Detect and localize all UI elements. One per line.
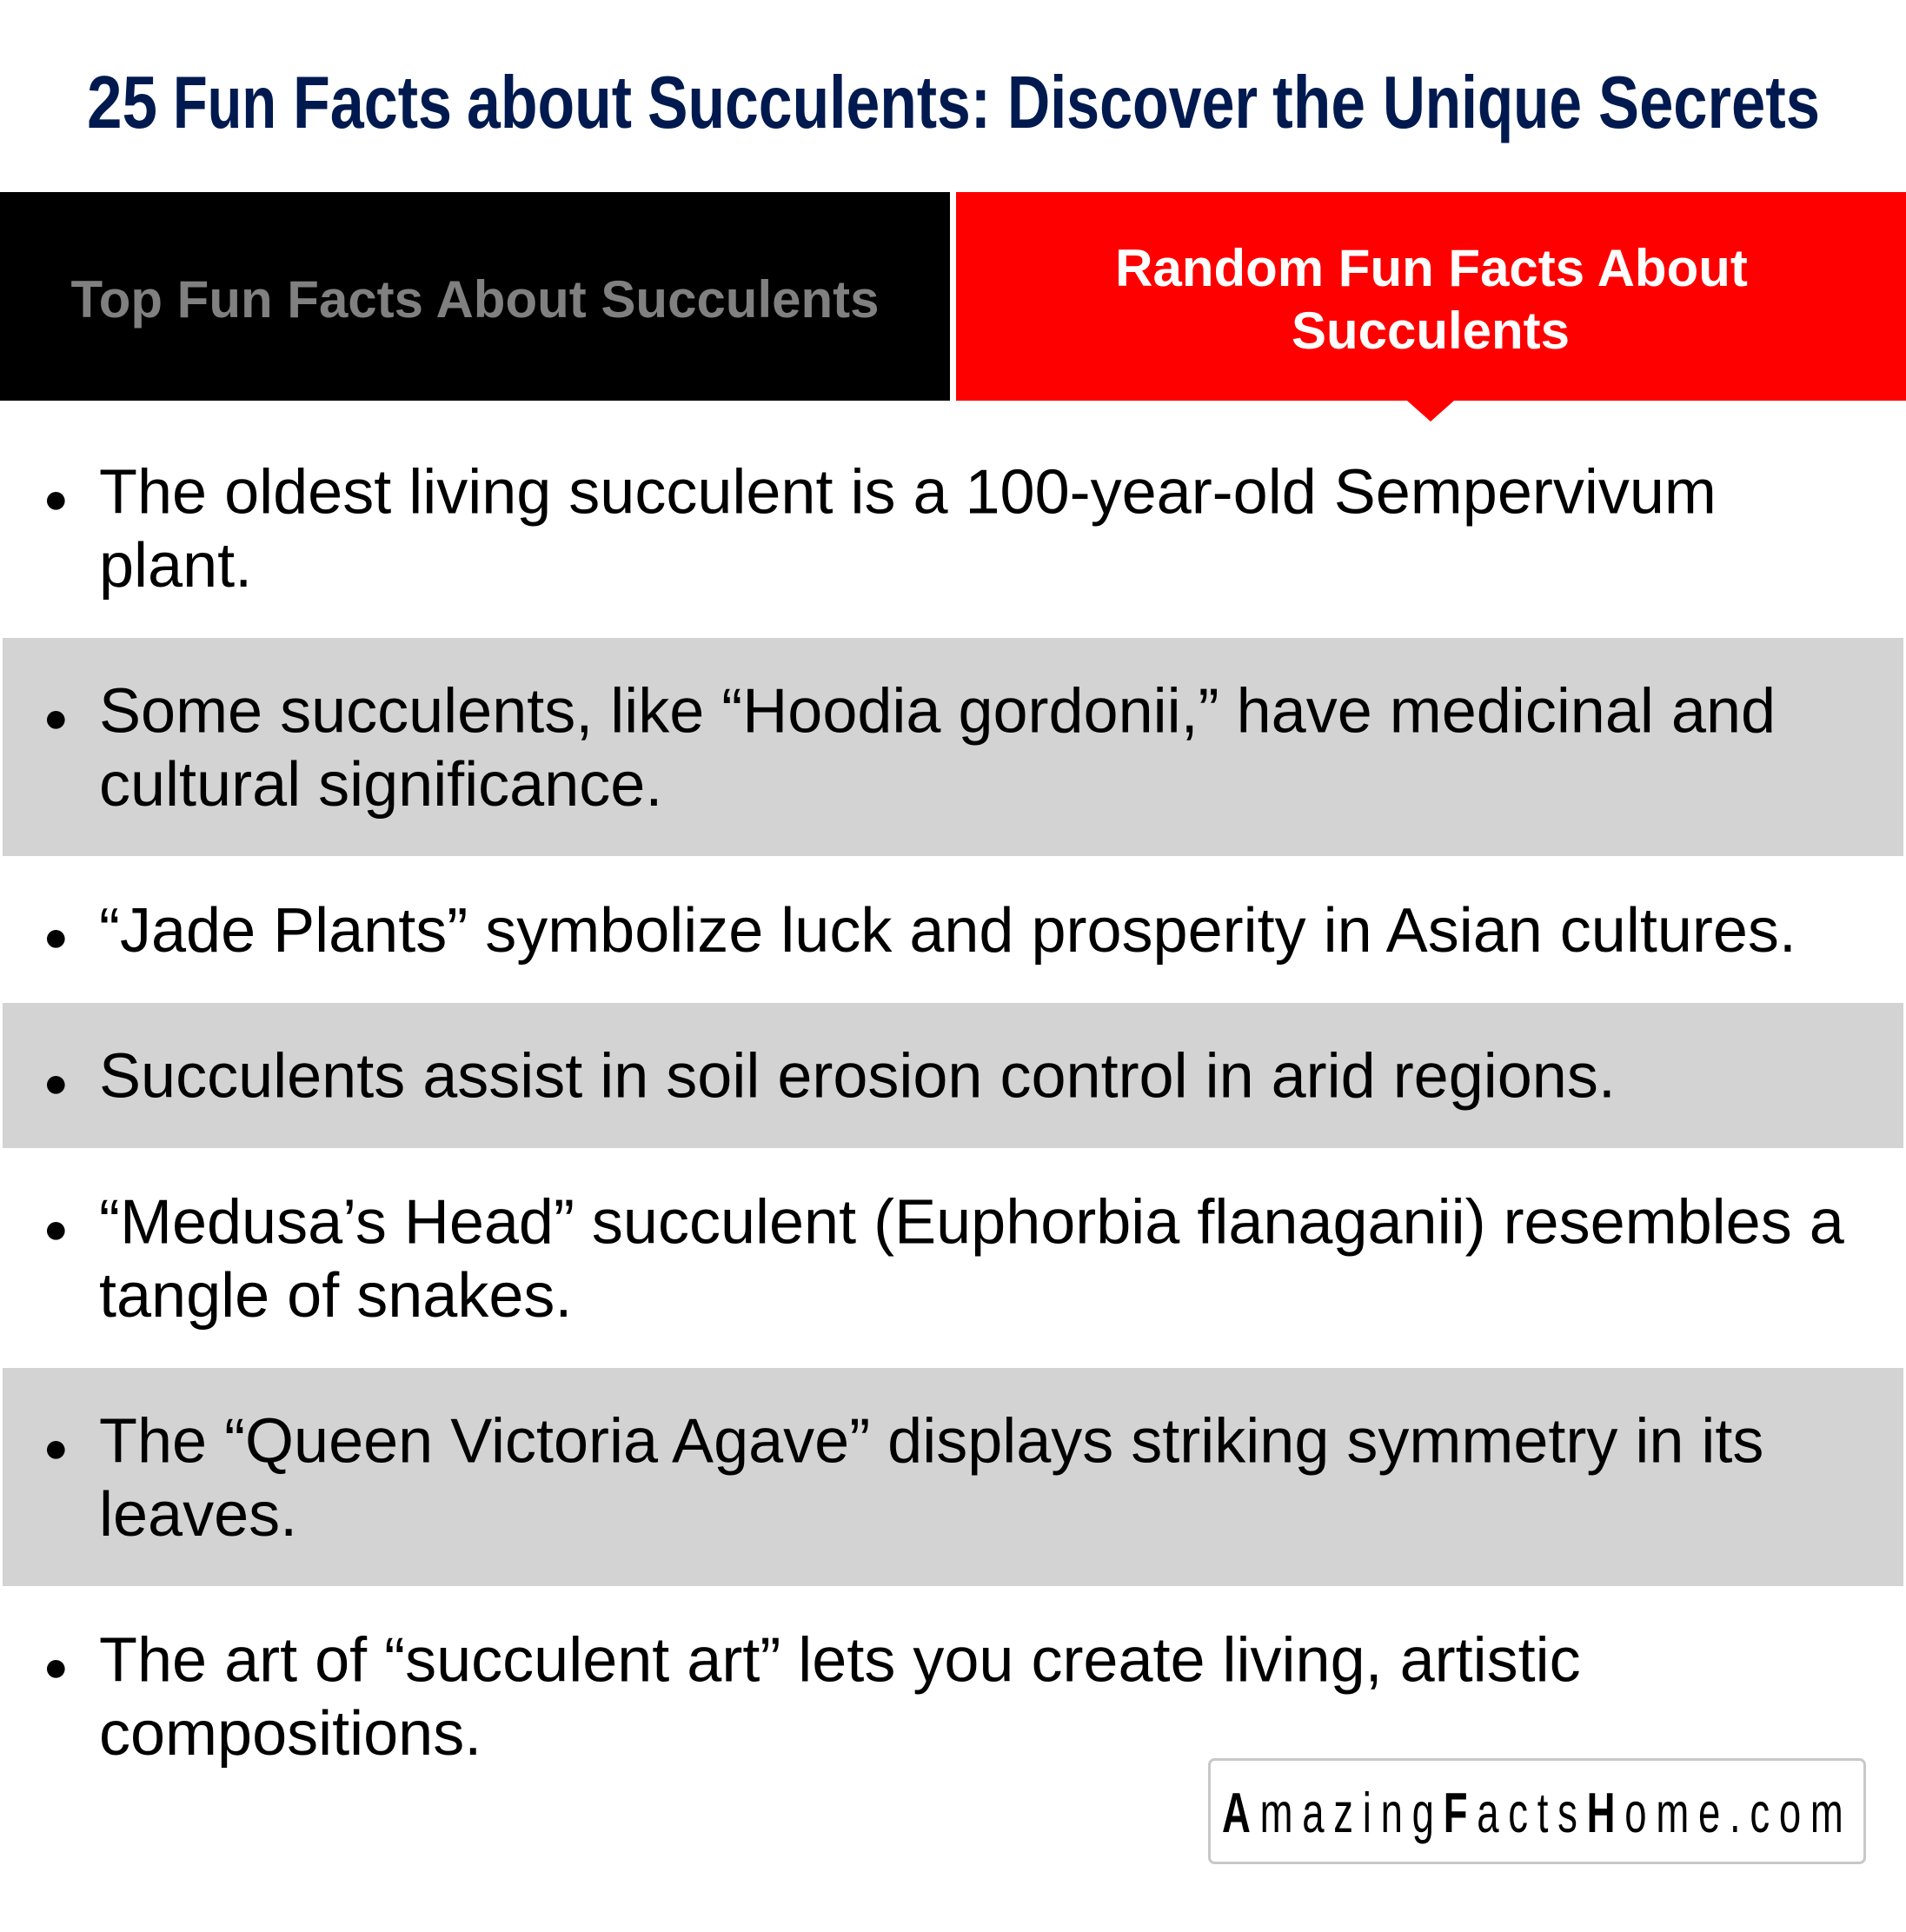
fact 7: The art of “succulent art” lets you create living, artistic bbox=[99, 1626, 1581, 1696]
tab: top fun facts (inactive) bbox=[0, 192, 950, 401]
watermark badge bbox=[1210, 1759, 1865, 1863]
fact 7: compositions. bbox=[99, 1699, 481, 1769]
title: Succulents: bbox=[648, 62, 991, 144]
title: Facts bbox=[293, 62, 452, 144]
tab label line 1: Random Fun Facts About bbox=[1115, 239, 1748, 297]
fact 1: The oldest living succulent is a 100-year-old Sempervivum bbox=[99, 458, 1717, 528]
fact 5: “Medusa’s Head” succulent (Euphorbia flanaganii) resembles a bbox=[99, 1188, 1845, 1258]
fact 2: Some succulents, like “Hoodia gordonii,” have medicinal and bbox=[99, 677, 1776, 747]
title: Fun bbox=[173, 62, 276, 144]
fact 2: cultural significance. bbox=[99, 750, 662, 820]
watermark text: AmazingFactsHome.com bbox=[1222, 1781, 1853, 1844]
tab label line 2: Succulents bbox=[1292, 302, 1570, 360]
tab label: Top Fun Facts About Succulents bbox=[71, 270, 880, 329]
title bbox=[87, 62, 1820, 144]
fact 5 bbox=[47, 1188, 1845, 1331]
fact 1 bbox=[47, 458, 1717, 601]
fact 1: plant. bbox=[99, 531, 252, 601]
title: Unique bbox=[1383, 62, 1582, 144]
row background 6 bbox=[3, 1368, 1903, 1586]
fact 2 bbox=[47, 677, 1776, 820]
title: Secrets bbox=[1598, 62, 1820, 144]
fact 6 bbox=[47, 1407, 1763, 1550]
tab: random fun facts (active) bbox=[956, 192, 1906, 422]
fact 4: Succulents assist in soil erosion control in arid regions. bbox=[99, 1042, 1616, 1112]
fact 6: leaves. bbox=[99, 1480, 297, 1550]
fact 7 bbox=[47, 1626, 1581, 1769]
title: 25 bbox=[87, 62, 157, 144]
fact 3: “Jade Plants” symbolize luck and prosperity in Asian cultures. bbox=[99, 896, 1796, 966]
row background 2 bbox=[3, 638, 1903, 856]
title: Discover bbox=[1007, 62, 1258, 144]
fact 5: tangle of snakes. bbox=[99, 1261, 572, 1331]
title: about bbox=[467, 62, 632, 144]
row background 4 bbox=[3, 1003, 1903, 1148]
title: the bbox=[1272, 62, 1365, 144]
fact 6: The “Queen Victoria Agave” displays striking symmetry in its bbox=[99, 1407, 1763, 1477]
